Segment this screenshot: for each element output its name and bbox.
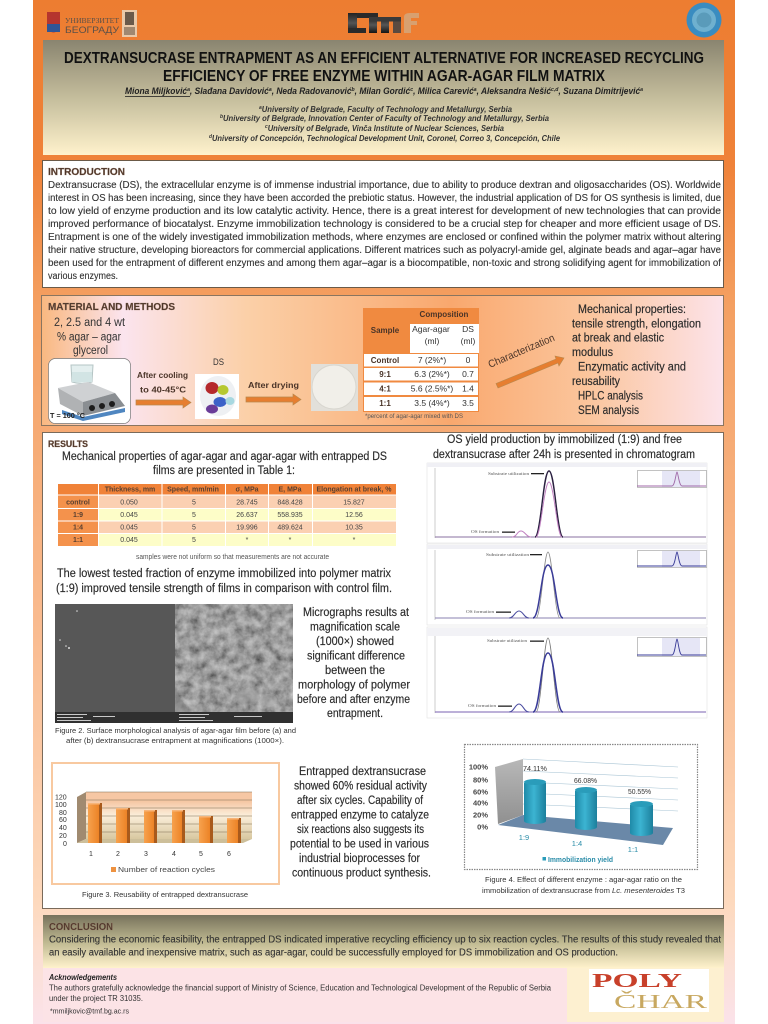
text: starting materials xyxy=(54,317,126,357)
table: mechanical properties: 26.637 xyxy=(236,512,258,519)
authors: b xyxy=(352,87,355,93)
authors xyxy=(125,86,643,97)
chart: chromatogram 3 xyxy=(427,627,707,718)
table: composition: Control xyxy=(371,356,399,365)
chart: chromatogram 1: Substrate utilization xyxy=(488,471,530,476)
icon: hot plate with beaker xyxy=(48,358,130,424)
table: composition: 7 (2%*) xyxy=(418,355,446,365)
text: after cooling xyxy=(137,370,188,394)
authors: , Milica Carević xyxy=(412,86,474,96)
table: mechanical properties: σ, MPa xyxy=(235,486,259,494)
data labels: 74.11% xyxy=(523,764,547,773)
bar chart: reusability: 4 xyxy=(172,851,176,858)
text: after drying: After drying xyxy=(248,380,299,390)
table: composition: 6.3 (2%*) xyxy=(414,369,450,379)
table: composition: 0 xyxy=(466,355,471,365)
heading: introduction: INTRODUCTION xyxy=(48,166,125,178)
panel: title xyxy=(43,40,724,155)
affiliations: a xyxy=(259,105,262,111)
table: composition: 4:1 xyxy=(379,384,391,394)
figure: SEM micrographs xyxy=(55,604,293,723)
text: chromatogram heading: dextransucrase after 24h is presented in chromatogram xyxy=(433,449,695,461)
text block: characterization methods: reusability xyxy=(572,376,620,388)
bar chart: reusability: 3 xyxy=(144,851,148,858)
arrow: characterization xyxy=(496,356,564,388)
title: EFFICIENCY OF FREE ENZYME WITHIN AGAR-AGAR FILM MATRIX xyxy=(163,68,606,85)
title xyxy=(64,50,704,85)
table: mechanical properties: 5 xyxy=(192,500,196,506)
caption: figure 2 xyxy=(55,726,296,745)
text: residual activity xyxy=(290,766,431,880)
table: composition xyxy=(363,308,479,412)
text: residual activity: entrapped enzyme to catalyze xyxy=(291,810,429,822)
text: micrographs: magnification scale xyxy=(310,622,400,634)
data labels xyxy=(523,764,651,796)
text: starting materials: 2, 2.5 and 4 wt xyxy=(54,317,126,329)
authors: c xyxy=(410,87,413,93)
table: composition: (ml) xyxy=(461,336,475,346)
text block: introduction: Dextransucrase (DS), the extracellular enzyme is of immense industrial importance, due to ability to produce dextran and oligosaccharides (OS). Worldwide xyxy=(48,180,721,191)
table: mechanical properties: 489.624 xyxy=(277,524,303,532)
text: micrographs: (1000×) showed xyxy=(316,636,394,648)
table footnote: *percent of agar-agar mixed with DS xyxy=(365,414,463,420)
text block: characterization methods: Mechanical properties: xyxy=(578,304,686,316)
table: mechanical properties: 0.045 xyxy=(120,524,138,532)
text block: acknowledgements: under the project TR 31035. xyxy=(49,994,143,1003)
logo: University of Belgrade: УНИВЕРЗИТЕТ xyxy=(65,17,120,25)
text: micrographs: Micrographs results at xyxy=(303,607,410,619)
chart: chromatogram 3: OS formation xyxy=(468,703,497,708)
table: mechanical properties: 19.996 xyxy=(236,524,258,532)
text block: introduction: been used for the entrapment of different enzymes and among them agar–agar is a biocompatible, non-toxic and strong solidifying agent for immobilization of xyxy=(48,258,721,269)
text: after cooling: to 40-45°C xyxy=(140,384,186,394)
table: composition: Composition xyxy=(420,310,469,319)
data labels: 66.08% xyxy=(574,776,597,785)
text block: characterization methods: modulus xyxy=(572,347,613,359)
logo: Polychar: POLY xyxy=(592,970,683,992)
text: residual activity: continuous product synthesis. xyxy=(292,868,431,880)
panel: conclusion xyxy=(43,915,724,968)
table: composition: 5.6 (2.5%*) xyxy=(411,384,453,394)
chart: chromatogram 1 xyxy=(427,463,707,543)
text block: conclusion: an easily available and inexpensive matrix, such as agar-agar, could be successfully employed for DS immobilization and OS production. xyxy=(49,948,618,958)
table: mechanical properties: 5 xyxy=(192,537,196,544)
category labels: 1:9 xyxy=(519,833,529,842)
authors: , Aleksandra Nešić xyxy=(476,86,551,96)
legend: Number of reaction cycles xyxy=(118,867,216,874)
table: mechanical properties: 0.050 xyxy=(120,500,138,506)
table: mechanical properties xyxy=(58,484,396,546)
table: mechanical properties: 1:4 xyxy=(73,524,83,532)
chart: chromatogram 2: Substrate utilization xyxy=(486,552,530,557)
table: composition: Agar-agar xyxy=(412,324,450,334)
bar chart: reusability: 100 xyxy=(55,802,67,809)
table: mechanical properties: 1:1 xyxy=(73,537,83,544)
bar chart: reusability: 20 xyxy=(59,833,67,840)
table: mechanical properties: * xyxy=(353,537,356,544)
table: mechanical properties: 848.428 xyxy=(277,500,303,506)
bar chart: reusability: 0 xyxy=(63,841,67,848)
table: mechanical properties: 15.827 xyxy=(343,500,365,506)
y axis labels: 100% xyxy=(469,762,488,772)
authors: c,d xyxy=(551,87,559,93)
table: mechanical properties: 10.35 xyxy=(345,524,363,532)
panel: results xyxy=(42,432,724,908)
logo: Polychar xyxy=(567,968,724,1022)
table: mechanical properties: 5 xyxy=(192,524,196,532)
affiliations: University of Belgrade, Vinča Institute of Nuclear Sciences, Serbia xyxy=(268,123,504,133)
label: characterization: Characterization xyxy=(486,332,557,371)
text: tensile strength finding: The lowest tested fraction of enzyme immobilized into polymer matrix xyxy=(57,568,391,580)
text block: characterization methods: tensile strength, elongation xyxy=(572,318,701,330)
table: mechanical properties: * xyxy=(289,537,292,544)
affiliations: b xyxy=(220,114,224,120)
caption: figure 2: after (b) dextransucrase entrapment at magnifications (1000×). xyxy=(66,736,284,745)
category labels xyxy=(519,833,638,854)
logo: University of Belgrade xyxy=(47,10,137,37)
chart: chromatogram 2: OS formation xyxy=(466,609,495,614)
text block: characterization methods: HPLC analysis xyxy=(578,390,643,402)
y axis labels: 0% xyxy=(477,822,488,832)
caption: figure 4 xyxy=(482,875,685,895)
text block: conclusion: Considering the economic feasibility, the entrapped DS indicated imperative recycling efficiency up to six reaction cycles. The results of this study revealed that xyxy=(49,934,721,946)
table: composition: 1.4 xyxy=(462,384,474,394)
affiliations: University of Belgrade, Faculty of Technology and Metallurgy, Serbia xyxy=(262,104,512,114)
caption: figure 2: Figure 2. Surface morphological analysis of agar-agar film before (a) and xyxy=(55,726,296,735)
table: mechanical properties: Speed, mm/min xyxy=(167,486,219,494)
affiliations: c xyxy=(265,124,268,130)
logo: round society seal xyxy=(686,2,722,38)
table: mechanical properties: 558.935 xyxy=(277,512,303,519)
y axis labels: 40% xyxy=(473,798,488,808)
chart: chromatogram 3: Substrate utilization xyxy=(487,638,528,643)
arrow: DS to film xyxy=(246,394,301,405)
chart: chromatogram 2 xyxy=(427,544,707,625)
chart: immobilization yield xyxy=(464,744,698,870)
text: table intro: films are presented in Table 1: xyxy=(153,465,295,477)
bar chart: reusability: 5 xyxy=(199,851,203,858)
authors: , Milan Gordić xyxy=(354,86,410,96)
text block: introduction: their native structure, developing bioreactors for commercial applications. Different matrices such as polyacryl-amide gel, alginate beads and agar–agar have xyxy=(48,245,721,256)
table: composition: 1:1 xyxy=(379,399,391,408)
table: composition: 0.7 xyxy=(462,369,474,379)
bar chart: reusability: 6 xyxy=(227,851,231,858)
text: micrographs: morphology of polymer xyxy=(298,680,410,692)
authors: a xyxy=(640,87,643,93)
arrow: cooling to DS xyxy=(136,397,191,408)
table: mechanical properties: 12.56 xyxy=(345,512,363,519)
heading: results: RESULTS xyxy=(48,439,88,450)
text block: characterization methods: Enzymatic activity and xyxy=(578,362,686,374)
table: composition: DS xyxy=(462,324,474,334)
bars xyxy=(88,803,241,843)
logo: Polychar: ČHAR xyxy=(614,989,708,1013)
authors: , Slađana Davidović xyxy=(189,86,269,96)
text: residual activity: after six cycles. Capability of xyxy=(297,795,424,807)
text: tensile strength finding: (1:9) improved tensile strength of films in comparison with control film. xyxy=(56,583,392,595)
bar chart: reusability: 120 xyxy=(55,794,67,802)
y axis labels: 60% xyxy=(473,788,488,796)
text block: acknowledgements: The authors gratefully acknowledge the financial support of Ministry of Science, Education and Technological Development of the Republic of Serbia xyxy=(49,984,552,992)
text: table intro: Mechanical properties of agar-agar and agar-agar with entrapped DS xyxy=(62,451,387,463)
text: residual activity: six reactions also suggests its xyxy=(297,824,424,836)
panel: introduction xyxy=(42,160,724,288)
text block: introduction: various enzymes. xyxy=(48,271,118,282)
text: micrographs: between the xyxy=(325,665,385,677)
text block: introduction: to low yield of enzyme production and its low catalytic activity. Hence, there is a great interest for development of new technologies that can provide xyxy=(48,206,721,217)
table: mechanical properties: control xyxy=(66,500,90,506)
table: mechanical properties: * xyxy=(246,537,249,544)
authors: a xyxy=(474,87,477,93)
bar chart: reusability: 1 xyxy=(89,851,93,858)
y axis labels: 80% xyxy=(473,776,488,784)
text: micrographs: significant difference xyxy=(307,650,405,662)
category labels: 1:4 xyxy=(572,839,582,848)
text: chromatogram heading: OS yield production by immobilized (1:9) and free xyxy=(447,434,682,446)
text block: acknowledgements xyxy=(43,968,567,1022)
affiliations: d xyxy=(209,134,213,140)
text: tensile strength finding xyxy=(56,568,392,595)
table: composition: 9:1 xyxy=(379,370,391,379)
bar chart: reusability: 40 xyxy=(59,825,67,832)
text: micrographs: entrapment. xyxy=(327,708,383,720)
heading: conclusion: CONCLUSION xyxy=(49,922,113,933)
affiliations: University of Belgrade, Innovation Center of Faculty of Technology and Metallurgy, Serbia xyxy=(223,113,549,123)
text block: characterization methods xyxy=(572,304,701,417)
bar chart: reusability: 80 xyxy=(59,810,67,817)
table: composition: Sample xyxy=(371,326,400,335)
table: mechanical properties: 28.745 xyxy=(236,500,258,506)
logo: University of Belgrade: БЕОГРАДУ xyxy=(65,25,119,35)
table: composition: 3.5 xyxy=(462,398,474,408)
text: micrographs xyxy=(297,607,410,720)
cylinders xyxy=(524,779,653,836)
data labels: 50.55% xyxy=(628,787,651,796)
text: chromatogram heading xyxy=(433,434,695,461)
text: residual activity: industrial bioprocesses for xyxy=(299,853,420,865)
text: residual activity: showed 60% residual activity xyxy=(294,780,427,792)
chart: chromatogram 1: OS formation xyxy=(471,529,500,534)
table: composition: 3.5 (4%*) xyxy=(414,398,450,408)
text block: characterization methods: SEM analysis xyxy=(578,405,639,417)
table: mechanical properties: Thickness, mm xyxy=(105,486,155,494)
text: residual activity: Entrapped dextransucrase xyxy=(299,766,426,778)
legend: Immobilization yield xyxy=(548,855,613,864)
text block: introduction: Entrapment is one of the widely investigated immobilization methods, where enzymes are enclosed or confined within the polymer matrix without altering xyxy=(48,232,721,243)
table: mechanical properties: 0.045 xyxy=(120,512,138,519)
text block: acknowledgements: Acknowledgements xyxy=(48,973,117,982)
caption: figure 3: Figure 3. Reusability of entrapped dextransucrase xyxy=(82,890,248,899)
text block: introduction: interest in OS has been increasing, since they have been accorded the prebiotic status. However, the industrial application of DS for OS synthesis is limited, due xyxy=(48,193,721,204)
authors: a xyxy=(187,87,190,93)
affiliations: University of Concepción, Technological Development Unit, Coronel, Correo 3, Concepción, Chile xyxy=(212,133,560,143)
text block: introduction xyxy=(48,180,721,282)
y axis labels: 20% xyxy=(473,810,488,820)
logo: TMF xyxy=(348,13,419,33)
bar chart: reusability: 2 xyxy=(116,851,120,858)
text block: acknowledgements: *mmiljkovic@tmf.bg.ac.rs xyxy=(50,1006,129,1016)
category labels: 1:1 xyxy=(628,845,638,854)
label: DS: DS xyxy=(213,357,224,367)
text: residual activity: potential to be used in various xyxy=(290,838,429,850)
bar chart: reusability xyxy=(52,763,279,884)
table: composition: (ml) xyxy=(425,336,439,346)
icon: enzyme structure xyxy=(195,374,239,419)
text: starting materials: % agar – agar xyxy=(57,332,121,344)
text: table intro xyxy=(62,451,387,477)
caption: figure 4: Figure 4. Effect of different enzyme : agar-agar ratio on the xyxy=(485,875,682,884)
authors: Miona Miljković xyxy=(125,86,192,96)
text block: characterization methods: at break and elastic xyxy=(572,332,664,344)
table: mechanical properties: 0.045 xyxy=(120,537,138,544)
text: starting materials: glycerol xyxy=(73,345,108,357)
affiliations xyxy=(209,104,560,143)
text block: introduction: improved performance of biocatalyst. Enzyme immobilization technology is considered to be a crucial step for cheaper and more efficient usage of DS. xyxy=(48,219,721,230)
bar chart: reusability: 60 xyxy=(59,817,67,824)
text: after cooling: After cooling xyxy=(137,370,188,380)
label: temperature: T = 100 °C xyxy=(50,411,86,420)
panel: material and methods xyxy=(42,296,724,426)
icon: agar film xyxy=(311,364,358,411)
table: mechanical properties: E, MPa xyxy=(279,486,302,494)
caption: figure 4: immobilization of dextransucrase from Lc. mesenteroides T3 xyxy=(482,886,685,895)
table note: samples were not uniform so that measurements are not accurate xyxy=(136,554,329,561)
table: mechanical properties: 1:9 xyxy=(73,512,83,519)
table: mechanical properties: 5 xyxy=(192,512,196,519)
authors: , Neda Radovanović xyxy=(271,86,352,96)
heading: material and methods: MATERIAL AND METHODS xyxy=(48,302,175,313)
authors: a xyxy=(269,87,272,93)
authors: , Suzana Dimitrijević xyxy=(558,86,640,96)
text block: conclusion xyxy=(49,934,721,958)
text: micrographs: before and after enzyme xyxy=(297,694,410,706)
y axis labels xyxy=(469,762,488,832)
table: mechanical properties: Elongation at break, % xyxy=(316,486,392,494)
